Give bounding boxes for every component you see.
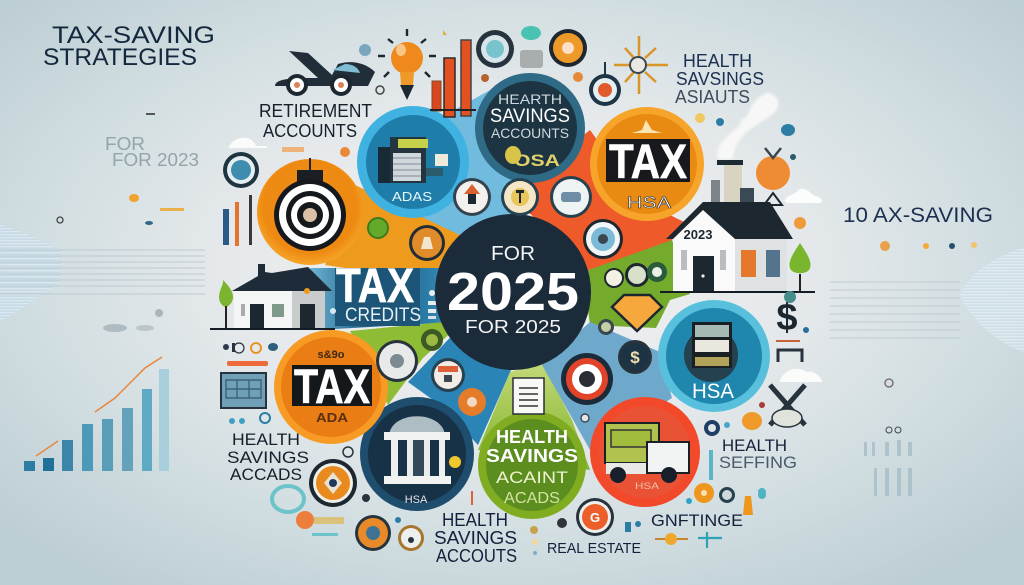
icon: dollar and lock cluster right	[759, 291, 822, 427]
right subtitle: 10 AX-SAVING	[843, 204, 993, 227]
small icons lower right	[530, 412, 766, 555]
panel: tax HSA orange circle: HSA	[627, 193, 672, 212]
panel: tax lower-left circle: ADA	[316, 410, 349, 425]
panel: blue circle ADAS: ADAS	[392, 189, 432, 204]
faded subtitle: FOR 2023	[112, 150, 199, 170]
label: health savings bottom: SAVINGS	[434, 528, 517, 548]
label: health savings left: SAVINGS	[227, 448, 309, 467]
right baseline	[660, 291, 815, 293]
icon: orange heart	[612, 295, 662, 331]
panel: HSA right circle	[658, 300, 770, 412]
label: real estate: REAL ESTATE	[547, 540, 641, 557]
icon: dollar and lock cluster right: $	[776, 297, 798, 339]
faded subtitle	[105, 134, 199, 170]
panel: green health savings circle: ACADS	[504, 490, 560, 507]
label: health savings left: HEALTH	[232, 430, 300, 449]
small icons lower left	[221, 343, 472, 551]
label: health savings top right: HEALTH	[683, 51, 752, 71]
left decorative lines and wave	[0, 224, 205, 322]
label: health savings left: ACCADS	[230, 465, 302, 484]
panel: HSA right circle: HSA	[692, 380, 734, 403]
panel: bank HSA circle: HSA	[405, 494, 428, 506]
panel: target circle	[257, 158, 363, 265]
label: retirement accounts	[259, 101, 372, 141]
icon: light bulb	[378, 29, 436, 100]
left house illustration	[219, 264, 332, 328]
left upper small icons	[223, 138, 350, 246]
panel: blue circle ADAS	[357, 106, 469, 218]
growth bar chart	[24, 357, 169, 471]
panel: centre hub: FOR	[491, 243, 535, 265]
panel: health savings accounts dark circle: OSA	[514, 151, 560, 170]
panel: health savings accounts dark circle: SAVINGS	[490, 106, 570, 127]
panel: tax HSA orange circle: TAX	[609, 136, 687, 189]
icon: document	[513, 378, 544, 414]
small icons lower right: G	[590, 510, 600, 525]
panel: red truck circle	[590, 397, 700, 507]
label: tax credits: TAX	[336, 260, 414, 313]
panel: health savings accounts dark circle	[475, 73, 585, 183]
right house illustration	[666, 92, 811, 292]
panel: health savings accounts dark circle: ACCOUNTS	[491, 125, 569, 141]
title	[43, 22, 215, 71]
icon: sun and dial	[589, 36, 668, 106]
panel: tax lower-left circle: TAX	[294, 361, 370, 414]
label: health savings top right: SAVSINGS	[676, 69, 764, 89]
wedges radiating from centre	[310, 90, 690, 470]
panel: green health savings circle: ACAINT	[496, 468, 568, 487]
panel: green health savings circle: HEALTH	[496, 427, 568, 447]
label: health seffing: HEALTH	[722, 436, 787, 455]
icon: teal drop and grey device	[520, 26, 543, 68]
label: health savings top right: ASIAUTS	[675, 87, 750, 107]
right house illustration: 2023	[684, 227, 712, 242]
faded specks left	[57, 113, 184, 332]
title: TAX-SAVING	[52, 22, 215, 49]
label: health seffing: SEFFING	[719, 453, 797, 472]
label: health savings bottom: ACCOUTS	[436, 546, 517, 566]
small circle icons along wedges: $	[630, 348, 640, 367]
label: health savings top right	[675, 51, 764, 107]
label: health savings left	[227, 430, 309, 484]
panel: centre hub: 2025	[447, 262, 579, 322]
faded subtitle: FOR	[105, 134, 145, 154]
title: STRATEGIES	[43, 44, 197, 71]
icon: red bars	[430, 40, 476, 117]
panel: green health savings circle	[478, 411, 586, 519]
icon: gauge	[476, 30, 514, 68]
icon: cloud right	[785, 189, 822, 203]
panel: tax HSA orange circle	[590, 107, 704, 221]
panel: centre hub	[435, 214, 591, 370]
panel: tax lower-left circle: s&9o	[318, 349, 345, 361]
panel: bank HSA circle	[360, 397, 474, 511]
label: health savings bottom	[434, 510, 517, 566]
right decorative lines and wave	[830, 247, 1024, 352]
small circle icons along wedges	[368, 176, 667, 422]
label: health savings bottom: HEALTH	[442, 510, 508, 530]
label: retirement accounts: RETIREMENT	[259, 101, 372, 121]
label: health seffing	[719, 436, 797, 472]
left baseline	[210, 328, 335, 330]
icon: orange balloon	[756, 148, 790, 205]
label: gnftinge: GNFTINGE	[651, 511, 743, 530]
icon: flame dial	[549, 29, 587, 67]
faded specks right	[864, 241, 977, 496]
panel: green health savings circle: SAVINGS	[486, 446, 578, 466]
panel: tax lower-left circle	[274, 330, 388, 444]
label: tax credits: CREDITS	[345, 305, 421, 326]
panel: red truck circle: HSA	[635, 481, 659, 491]
icon: car	[275, 51, 375, 96]
label: retirement accounts: ACCOUNTS	[263, 121, 357, 141]
panel: centre hub: FOR 2025	[465, 317, 561, 337]
icon: small orange specks	[359, 30, 806, 229]
panel: health savings accounts dark circle: HEARTH	[498, 91, 562, 107]
